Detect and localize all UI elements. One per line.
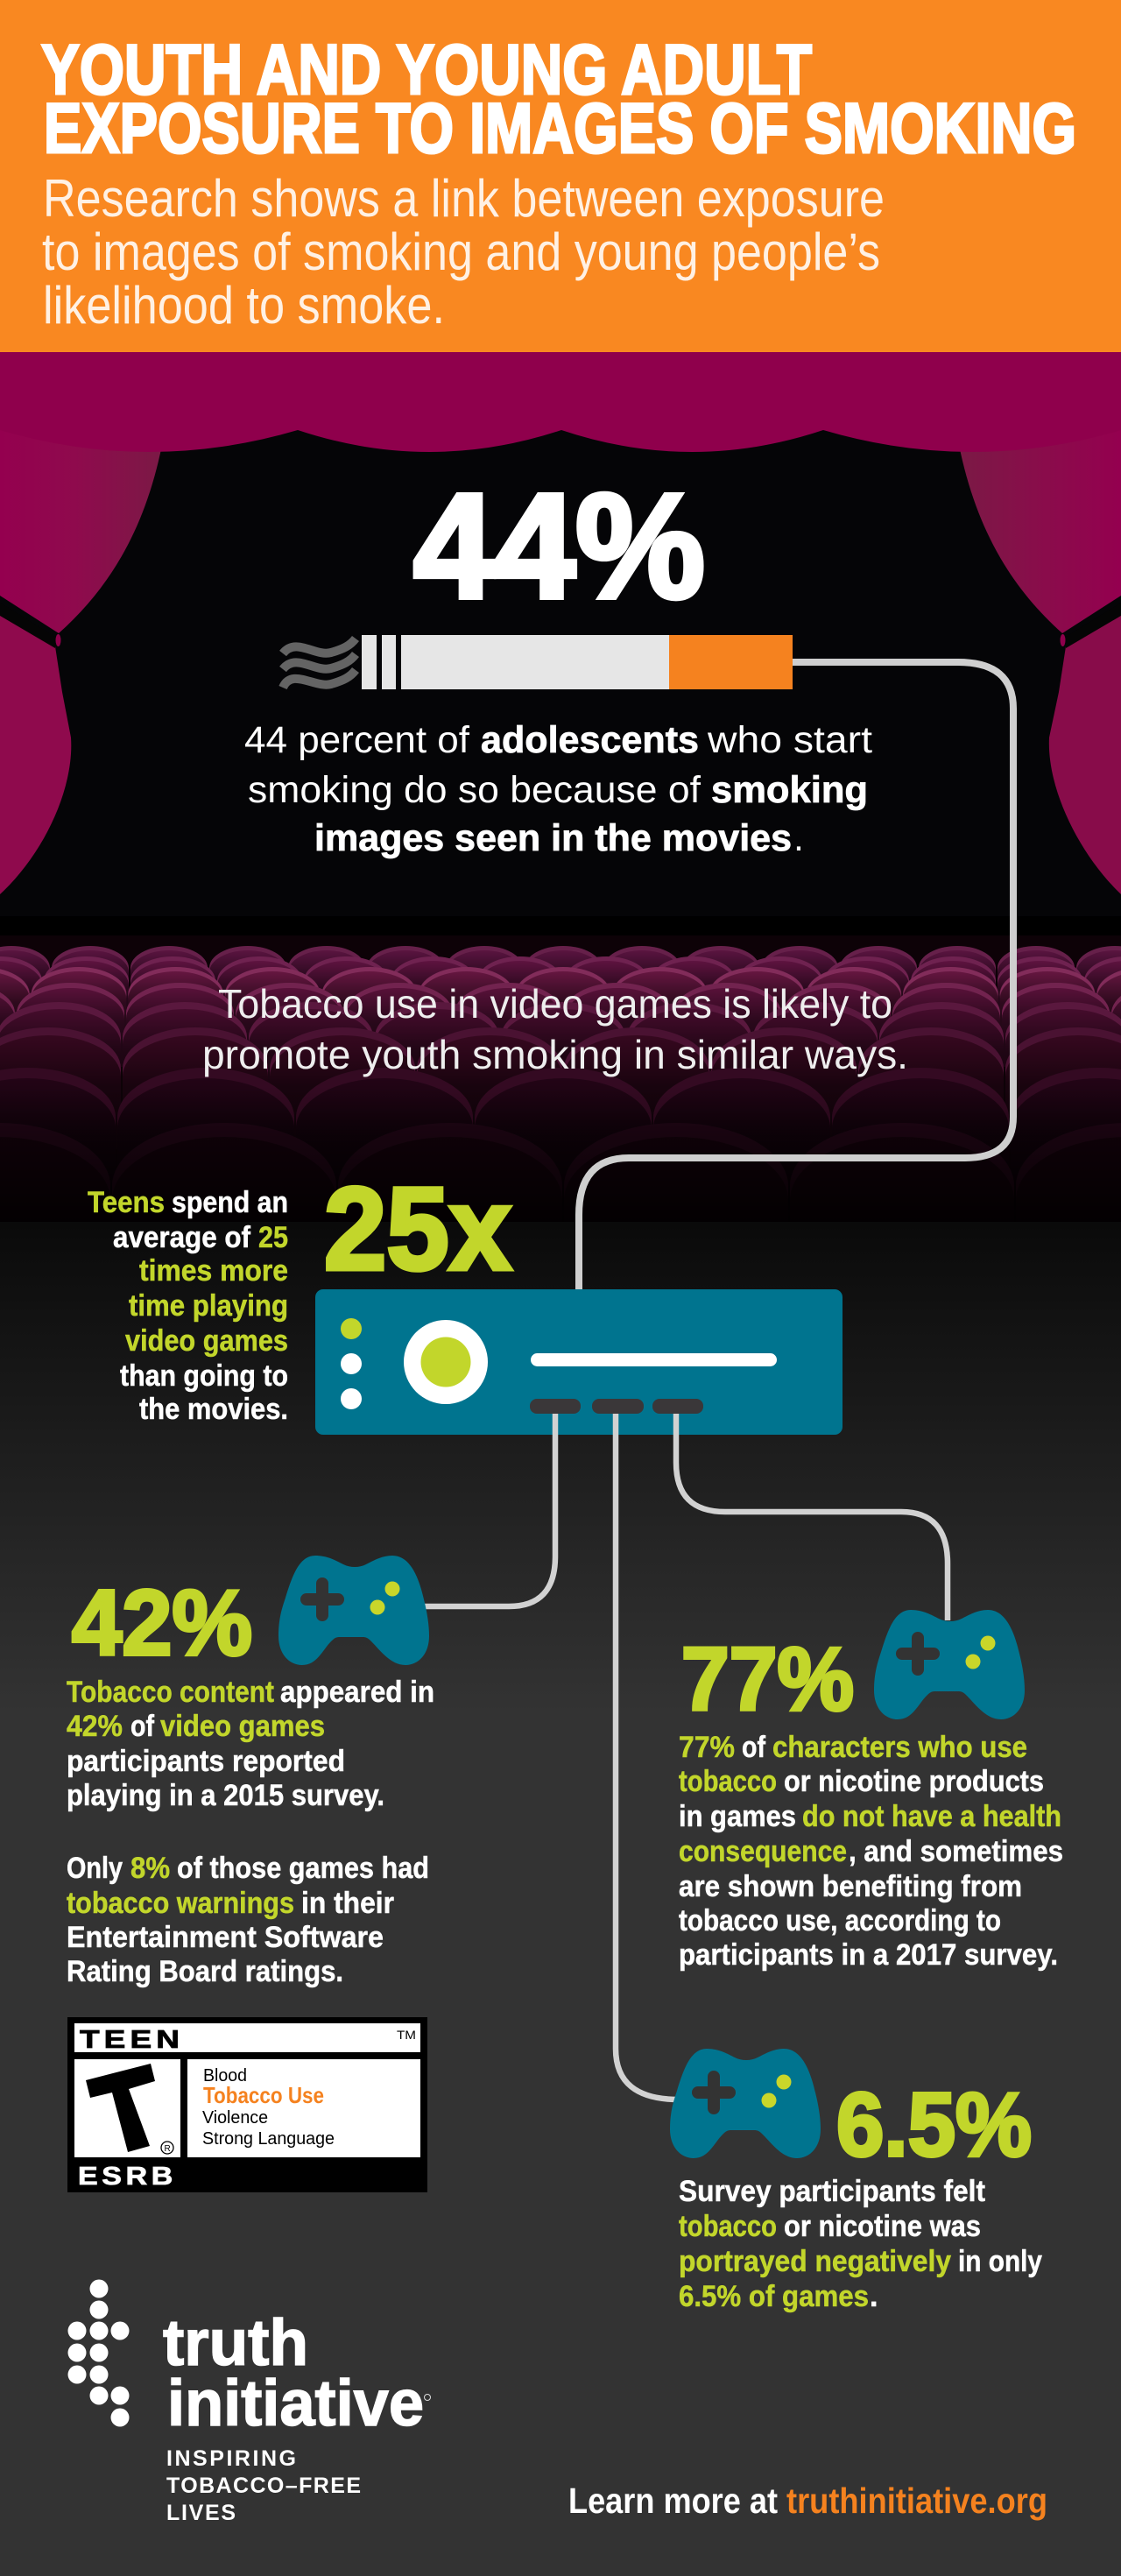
console ports [530, 1399, 703, 1414]
ESRB teen rating label: ESRB [78, 2163, 177, 2191]
logo wordmark: truth [163, 2306, 308, 2379]
subtitle [42, 169, 885, 335]
text: survey participants felt: 6.5% of games [679, 2280, 869, 2313]
left curtain [0, 420, 166, 894]
text: 77 percent of characters: are shown benefiting from [679, 1870, 1022, 1903]
text: teens spend 25 times more: spend an [172, 1186, 288, 1219]
text: tobacco use in video games: Tobacco use in video games is likely to [218, 981, 892, 1027]
ESRB teen rating label: TEEN [80, 2026, 184, 2054]
icon: cigarette with smoke [283, 635, 793, 689]
text: 44 percent of adolescents: smoking [711, 769, 868, 811]
icon: game controller upper right [874, 1610, 1025, 1719]
truth initiative logo [68, 2279, 431, 2525]
text: survey participants felt: or nicotine was [784, 2210, 981, 2243]
cable: console to 77% controller [676, 1412, 948, 1620]
ESRB teen rating label: R [165, 2144, 171, 2154]
text: 77 percent of characters: tobacco [679, 1765, 777, 1798]
subtitle: Research shows a link between exposure [43, 169, 885, 228]
text: 77 percent of characters: , and sometimes [849, 1835, 1063, 1868]
text: tobacco content: appeared in [280, 1676, 434, 1709]
subtitle: to images of smoking and young people’s [42, 222, 880, 281]
text: 77 percent of characters: characters who use [772, 1731, 1027, 1764]
logo tagline: INSPIRING [166, 2446, 296, 2471]
icon: game controller left [278, 1556, 429, 1665]
logo tagline: TOBACCO–FREE [166, 2474, 361, 2498]
text: 44 percent of adolescents: 44 percent of [244, 719, 470, 761]
text: tobacco content: Tobacco content [67, 1676, 274, 1709]
text: teens spend 25 times more: video games [125, 1324, 288, 1358]
statistic: 77%: 77% [681, 1629, 854, 1729]
cable: cigarette to console [579, 662, 1013, 1290]
text: 77 percent of characters: or nicotine products [784, 1765, 1044, 1798]
text: teens spend 25 times more: the movies. [139, 1393, 288, 1426]
text: only 8 percent had warnings: tobacco warnings [67, 1887, 294, 1920]
text: tobacco content: participants reported [67, 1745, 345, 1778]
text: 77 percent of characters [679, 1731, 1063, 1972]
text: 44 percent of adolescents: adolescents [481, 719, 699, 761]
logo wordmark [163, 2306, 431, 2439]
text: only 8 percent had warnings: of those games had [177, 1852, 429, 1885]
title [41, 31, 1076, 168]
text: survey participants felt: tobacco [679, 2210, 777, 2243]
text: teens spend 25 times more: time playing [129, 1289, 288, 1323]
logo dots [68, 2279, 130, 2426]
text: tobacco content: 42% [67, 1710, 123, 1743]
footer call to action [568, 2481, 1047, 2521]
text: only 8 percent had warnings: in their [301, 1887, 394, 1920]
footer call to action: truthinitiative.org [786, 2481, 1047, 2521]
text: teens spend 25 times more [88, 1186, 288, 1426]
text: survey participants felt: portrayed negatively [679, 2245, 951, 2278]
text: 77 percent of characters: in games [679, 1800, 796, 1833]
text: survey participants felt: in only [958, 2245, 1042, 2278]
text: only 8 percent had warnings: 8% [130, 1852, 170, 1885]
text: only 8 percent had warnings: Only [67, 1852, 123, 1885]
statistic: 42%: 42% [72, 1571, 252, 1675]
text: only 8 percent had warnings [67, 1852, 429, 1988]
cable: console to 42% controller [420, 1412, 555, 1606]
text: survey participants felt [679, 2175, 1042, 2313]
text: teens spend 25 times more: average of [113, 1221, 251, 1254]
statistic: 25x: 25x [324, 1164, 511, 1295]
ESRB teen rating label: TM [397, 2028, 416, 2042]
statistic: 44%: 44% [413, 463, 705, 630]
text: tobacco content: of [130, 1710, 155, 1743]
ESRB teen rating label: Blood [203, 2066, 247, 2086]
theater seats [0, 916, 1121, 1222]
ESRB teen rating label: Strong Language [202, 2129, 335, 2149]
text: 44 percent of adolescents: who start [707, 719, 872, 761]
text: 44 percent of adolescents: smoking do so because of [248, 769, 702, 811]
title: YOUTH AND YOUNG ADULT [41, 31, 812, 109]
text: teens spend 25 times more: Teens [88, 1186, 165, 1219]
text: survey participants felt: Survey participants felt [679, 2175, 985, 2208]
cable: console to 6.5% controller [616, 1412, 679, 2100]
text: 77 percent of characters: of [742, 1731, 766, 1764]
lower background gradient [0, 1222, 1121, 1712]
text: tobacco use in video games [202, 981, 908, 1077]
text: 77 percent of characters: tobacco use, according to [679, 1904, 1001, 1937]
statistic: 6.5%: 6.5% [836, 2074, 1032, 2175]
ESRB teen rating label: Violence [202, 2108, 268, 2128]
logo wordmark: initiative [167, 2367, 424, 2439]
text: 77 percent of characters: do not have a health [802, 1800, 1061, 1833]
text: teens spend 25 times more: than going to [120, 1359, 288, 1393]
text: only 8 percent had warnings: Entertainment Software [67, 1921, 384, 1954]
text: 44 percent of adolescents [244, 719, 872, 859]
text: tobacco content: playing in a 2015 survey. [67, 1779, 384, 1812]
text: 77 percent of characters: 77% [679, 1731, 735, 1764]
text: 44 percent of adolescents: images seen in the movies [314, 817, 792, 859]
subtitle: likelihood to smoke. [43, 276, 445, 335]
text: teens spend 25 times more: times more [139, 1254, 288, 1288]
logo tagline: LIVES [166, 2501, 236, 2525]
text: teens spend 25 times more: 25 [258, 1221, 288, 1254]
text: survey participants felt: . [870, 2280, 878, 2313]
logo tagline [166, 2446, 361, 2525]
ESRB teen rating label: Tobacco Use [203, 2082, 324, 2108]
text: 77 percent of characters: consequence [679, 1835, 847, 1868]
ESRB teen rating label [67, 2017, 427, 2192]
text: tobacco content: video games [160, 1710, 325, 1743]
icon: game console [315, 1289, 843, 1435]
text: only 8 percent had warnings: Rating Board ratings. [67, 1955, 343, 1988]
theater stage backdrop [0, 352, 1121, 916]
header banner [0, 0, 1121, 352]
text: tobacco content [67, 1676, 434, 1812]
icon: game controller lower right [670, 2049, 821, 2158]
footer call to action: Learn more at [568, 2481, 778, 2521]
curtain valance [0, 352, 1121, 452]
text: tobacco use in video games: promote youth smoking in similar ways. [202, 1032, 908, 1077]
text: 44 percent of adolescents: . [793, 817, 804, 859]
right curtain [955, 420, 1121, 894]
text: 77 percent of characters: participants in a 2017 survey. [679, 1938, 1058, 1972]
